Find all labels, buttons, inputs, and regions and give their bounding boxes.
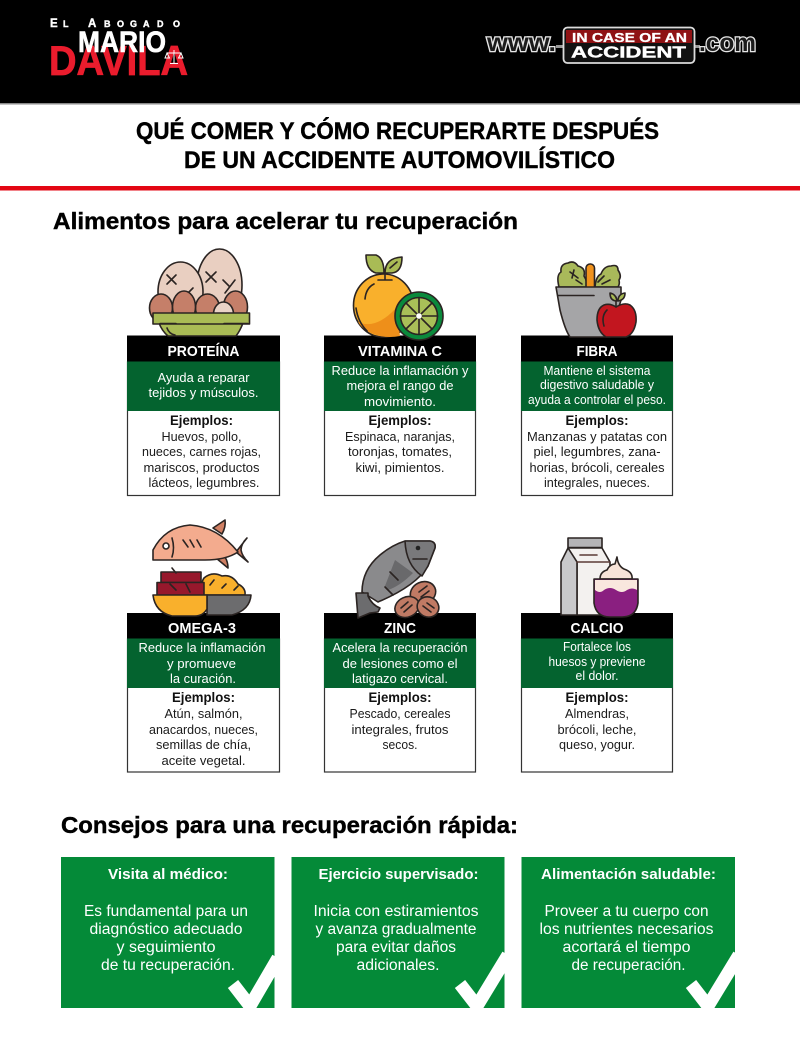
panel: zinc: Ejemplos: — [368, 690, 432, 705]
heading: foods: Alimentos para acelerar tu recuperación — [53, 208, 518, 234]
panel: omega-3: Reduce la inflamación — [138, 640, 266, 655]
panel: fiber: integrales, nueces. — [544, 475, 650, 490]
panel: vitamin C — [324, 336, 476, 496]
panel: zinc — [324, 613, 476, 772]
header band — [0, 0, 800, 104]
icon: salad bowl with apple — [556, 262, 636, 337]
panel: healthy eating: acortará el tiempo — [562, 939, 690, 956]
website logo: IN CASE OF AN — [572, 30, 687, 45]
panel: protein: mariscos, productos — [144, 460, 260, 475]
website logo — [486, 28, 756, 63]
panel: omega-3: anacardos, nueces, — [149, 722, 258, 737]
panel: protein: PROTEÍNA — [168, 343, 240, 360]
title — [136, 117, 659, 174]
title: DE UN ACCIDENTE AUTOMOVILÍSTICO — [184, 146, 615, 174]
panel: zinc: secos. — [382, 737, 418, 752]
panel: fiber: Manzanas y patatas con — [527, 429, 667, 444]
icon: orange and lime — [354, 255, 443, 340]
panel: omega-3: OMEGA-3 — [168, 620, 236, 637]
panel: protein: lácteos, legumbres. — [148, 475, 260, 490]
website logo: ACCIDENT — [571, 44, 686, 62]
panel: supervised exercise: Ejercicio supervisado: — [318, 867, 478, 883]
panel: zinc: Acelera la recuperación — [332, 640, 468, 655]
panel: protein — [127, 336, 280, 496]
panel: healthy eating: Alimentación saludable: — [541, 867, 716, 883]
panel: calcium: huesos y previene — [548, 655, 646, 669]
panel: omega-3: y promueve — [167, 656, 236, 671]
icon: check mark — [233, 958, 278, 1006]
panel: calcium: Ejemplos: — [566, 690, 628, 705]
panel: zinc: ZINC — [384, 620, 416, 637]
panel: healthy eating: Proveer a tu cuerpo con — [544, 903, 708, 920]
panel: fiber: Ejemplos: — [566, 413, 628, 428]
panel: fiber — [521, 336, 673, 496]
panel: protein: Ayuda a reparar — [158, 370, 250, 385]
panel: calcium: queso, yogur. — [559, 737, 635, 752]
panel: calcium: brócoli, leche, — [558, 722, 636, 737]
icon: check mark — [460, 955, 508, 1006]
panel: omega-3: Ejemplos: — [172, 690, 235, 705]
panel: zinc: de lesiones como el — [342, 656, 458, 671]
icon: gray fish and nuts — [356, 541, 442, 621]
panel: vitamin C: toronjas, tomates, — [348, 444, 452, 459]
panel: calcium: el dolor. — [576, 669, 618, 683]
icon: eggs in basket — [150, 249, 250, 336]
panel: zinc: Pescado, cereales — [350, 706, 451, 721]
panel: vitamin C: VITAMINA C — [358, 343, 442, 360]
panel: vitamin C: kiwi, pimientos. — [356, 460, 444, 475]
panel: vitamin C: movimiento. — [364, 394, 436, 409]
panel: protein: tejidos y músculos. — [148, 385, 258, 400]
panel: doctor visit — [61, 857, 278, 1008]
panel: protein: nueces, carnes rojas, — [142, 444, 261, 459]
logo: El Abogado Mario Davila: DAVILA — [49, 37, 188, 84]
panel: doctor visit: Visita al médico: — [108, 867, 228, 883]
panel: fiber: horias, brócoli, cereales — [530, 460, 665, 475]
panel: supervised exercise: y avanza gradualmente — [316, 921, 476, 938]
panel: protein: Huevos, pollo, — [162, 429, 242, 444]
panel: fiber: ayuda a controlar el peso. — [528, 393, 666, 407]
panel: supervised exercise: adicionales. — [356, 957, 440, 974]
logo: El Abogado Mario Davila: E L A BOGADO — [50, 18, 180, 30]
heading: tips: Consejos para una recuperación rápida: — [61, 812, 518, 838]
panel: vitamin C: Ejemplos: — [368, 413, 432, 428]
panel: omega-3: la curación. — [170, 671, 236, 686]
panel: supervised exercise: Inicia con estiramientos — [314, 903, 479, 920]
panel: zinc: latigazo cervical. — [352, 671, 448, 686]
panel: calcium — [521, 613, 673, 772]
icon: check mark — [691, 955, 739, 1006]
panel: healthy eating: los nutrientes necesarios — [540, 921, 714, 938]
title: QUÉ COMER Y CÓMO RECUPERARTE DESPUÉS — [136, 117, 659, 145]
website logo: www. — [486, 29, 556, 57]
panel: supervised exercise: para evitar daños — [336, 939, 456, 956]
panel: supervised exercise — [292, 857, 508, 1008]
panel: vitamin C: Espinaca, naranjas, — [345, 429, 455, 444]
panel: calcium: CALCIO — [570, 620, 624, 637]
icon: milk carton and yogurt — [561, 538, 638, 617]
logo: El Abogado Mario Davila: MARIO — [78, 26, 166, 59]
panel: calcium: Almendras, — [565, 706, 629, 721]
panel: doctor visit: y seguimiento — [116, 939, 216, 956]
logo: El Abogado Mario Davila — [49, 18, 188, 84]
icon: salmon, meat and bowls — [153, 520, 251, 616]
panel: doctor visit: diagnóstico adecuado — [90, 921, 242, 938]
website logo: .com — [699, 29, 756, 57]
panel: fiber: piel, legumbres, zana- — [534, 444, 660, 459]
panel: calcium: Fortalece los — [563, 640, 631, 654]
panel: omega-3: Atún, salmón, — [164, 706, 242, 721]
panel: fiber: FIBRA — [576, 343, 618, 360]
panel: fiber: Mantiene el sistema — [544, 364, 651, 378]
panel: doctor visit: Es fundamental para un — [84, 903, 248, 920]
panel: vitamin C: mejora el rango de — [346, 378, 454, 393]
panel: healthy eating: de recuperación. — [572, 957, 686, 974]
panel: zinc: integrales, frutos — [352, 722, 449, 737]
panel: vitamin C: Reduce la inflamación y — [332, 363, 469, 378]
panel: protein: Ejemplos: — [170, 413, 233, 428]
panel: fiber: digestivo saludable y — [540, 378, 655, 392]
panel: omega-3: semillas de chía, — [156, 737, 251, 752]
panel: omega-3 — [127, 613, 280, 772]
panel: healthy eating — [522, 857, 739, 1008]
icon: scales — [165, 50, 183, 64]
panel: doctor visit: de tu recuperación. — [101, 957, 235, 974]
panel: omega-3: aceite vegetal. — [162, 753, 246, 768]
